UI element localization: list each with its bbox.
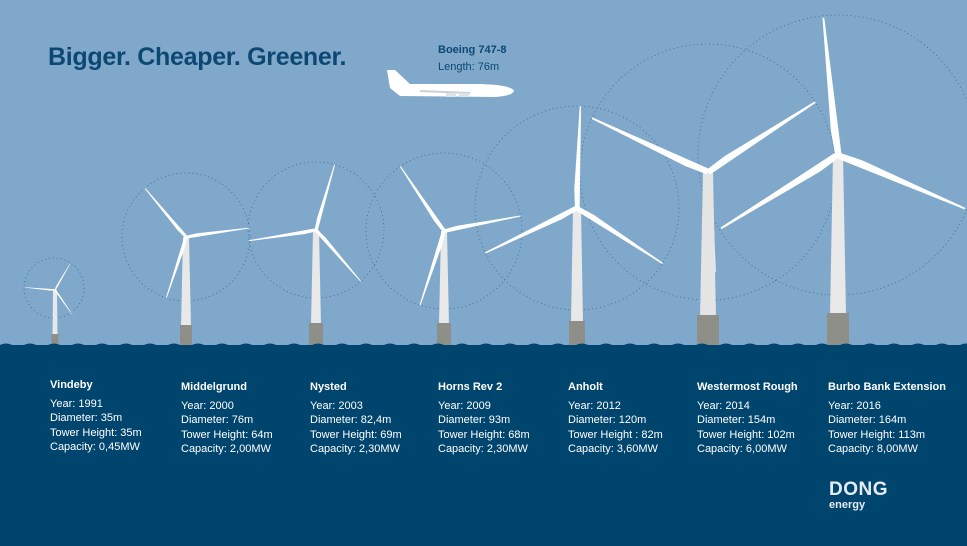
logo: DONG energy: DONG bbox=[829, 479, 888, 500]
info: Nysted: Nysted bbox=[310, 381, 347, 393]
info: Vindeby: Tower Height: 35m bbox=[50, 427, 142, 439]
info: Vindeby: Vindeby bbox=[50, 379, 93, 391]
info: Anholt bbox=[568, 381, 663, 455]
info: Burbo Bank Extension: Burbo Bank Extension bbox=[828, 381, 946, 393]
plane label bbox=[438, 44, 506, 73]
info: Middelgrund: Middelgrund bbox=[181, 381, 247, 393]
sea bbox=[0, 344, 967, 546]
plane label: Boeing 747-8 bbox=[438, 44, 506, 56]
turbine: Burbo Bank Extension bbox=[719, 17, 967, 345]
info: Burbo Bank Extension: Diameter: 164m bbox=[828, 414, 906, 426]
info: Westermost Rough: Diameter: 154m bbox=[697, 414, 775, 426]
turbine: Westermost Rough bbox=[590, 99, 817, 345]
info: Westermost Rough: Capacity: 6,00MW bbox=[697, 443, 787, 455]
turbine: Vindeby bbox=[25, 264, 73, 345]
info: Horns Rev 2: Horns Rev 2 bbox=[438, 381, 502, 393]
info: Nysted: Diameter: 82,4m bbox=[310, 414, 391, 426]
info: Westermost Rough: Year: 2014 bbox=[697, 400, 750, 412]
info: Burbo Bank Extension: Tower Height: 113m bbox=[828, 429, 925, 441]
info: Middelgrund: Capacity: 2,00MW bbox=[181, 443, 271, 455]
info: Anholt: Year: 2012 bbox=[568, 400, 621, 412]
turbine: Anholt bbox=[484, 106, 664, 345]
title: Bigger. Cheaper. Greener. bbox=[48, 43, 346, 71]
info: Horns Rev 2: Tower Height: 68m bbox=[438, 429, 530, 441]
info: Westermost Rough bbox=[697, 381, 798, 455]
info: Middelgrund: Year: 2000 bbox=[181, 400, 234, 412]
logo: DONG energy: energy bbox=[829, 499, 865, 511]
info: Westermost Rough: Westermost Rough bbox=[697, 381, 798, 393]
info: Nysted: Tower Height: 69m bbox=[310, 429, 402, 441]
info: Middelgrund: Diameter: 76m bbox=[181, 414, 253, 426]
info: Horns Rev 2: Year: 2009 bbox=[438, 400, 491, 412]
turbine: Middelgrund bbox=[143, 187, 250, 345]
info: Nysted bbox=[310, 381, 402, 455]
info: Vindeby: Capacity: 0,45MW bbox=[50, 441, 140, 453]
turbine: Nysted bbox=[249, 164, 362, 345]
turbine: Horns Rev 2 bbox=[398, 165, 521, 345]
info: Vindeby: Diameter: 35m bbox=[50, 412, 122, 424]
info: Burbo Bank Extension: Capacity: 8,00MW bbox=[828, 443, 918, 455]
rotor circles bbox=[24, 15, 967, 318]
info: Burbo Bank Extension bbox=[828, 381, 946, 455]
info: Middelgrund bbox=[181, 381, 273, 455]
info: Vindeby bbox=[50, 379, 142, 453]
info: Horns Rev 2: Diameter: 93m bbox=[438, 414, 510, 426]
info: Anholt: Capacity: 3,60MW bbox=[568, 443, 658, 455]
info: Nysted: Capacity: 2,30MW bbox=[310, 443, 400, 455]
info: Burbo Bank Extension: Year: 2016 bbox=[828, 400, 881, 412]
info: Westermost Rough: Tower Height: 102m bbox=[697, 429, 795, 441]
plane label: Length: 76m bbox=[438, 61, 499, 73]
info: Anholt: Diameter: 120m bbox=[568, 414, 646, 426]
info: Anholt: Anholt bbox=[568, 381, 603, 393]
info: Horns Rev 2 bbox=[438, 381, 530, 455]
info: Anholt: Tower Height : 82m bbox=[568, 429, 663, 441]
info: Nysted: Year: 2003 bbox=[310, 400, 363, 412]
info: Horns Rev 2: Capacity: 2,30MW bbox=[438, 443, 528, 455]
info: Middelgrund: Tower Height: 64m bbox=[181, 429, 273, 441]
info: Vindeby: Year: 1991 bbox=[50, 398, 103, 410]
icon: airplane bbox=[387, 70, 514, 97]
logo: DONG energy bbox=[829, 479, 888, 511]
